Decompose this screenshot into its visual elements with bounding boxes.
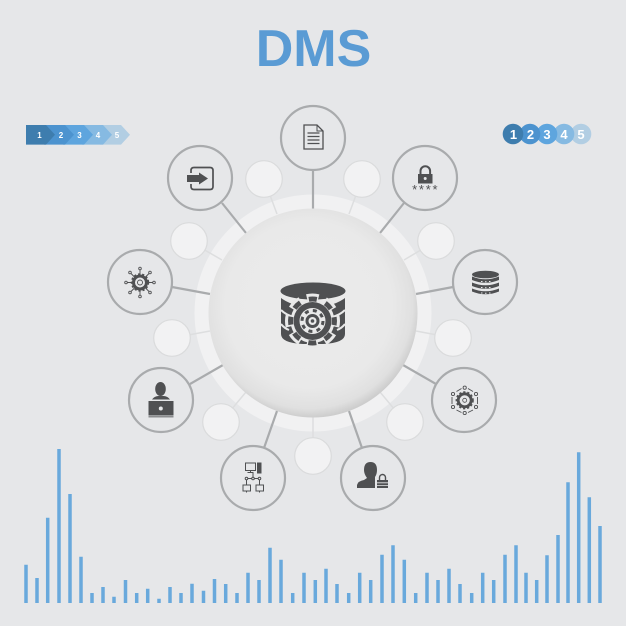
- step circles legend: 5: [577, 127, 585, 142]
- icon: document: [304, 125, 323, 149]
- step circles legend: [503, 124, 591, 144]
- step circles legend: 2: [527, 127, 534, 142]
- large node circles: [108, 106, 517, 510]
- icon: login arrow: [187, 168, 213, 190]
- title: DMS: [256, 20, 371, 78]
- step arrows legend: 5: [115, 131, 120, 140]
- step arrows legend: [26, 125, 130, 145]
- icon: gear with orbit: [451, 386, 478, 415]
- icon: lock with password: [412, 166, 439, 197]
- icon: lock with password: ****: [412, 182, 439, 197]
- central circle: [208, 208, 418, 418]
- icon: person at laptop: [148, 382, 174, 418]
- step arrows legend: 1: [37, 131, 42, 140]
- icon: database with gear: [280, 282, 346, 351]
- bar chart: [26, 449, 600, 603]
- step arrows legend: 3: [77, 131, 82, 140]
- step arrows legend: 2: [59, 131, 64, 140]
- icon: hub gear: [125, 267, 155, 298]
- small node circles: [154, 161, 471, 474]
- icon: computer network: [243, 463, 264, 492]
- step circles legend: 1: [510, 127, 517, 142]
- step circles legend: 4: [560, 127, 568, 142]
- connector lines: large nodes: [172, 170, 453, 448]
- icon: database: [472, 271, 499, 294]
- outer ring: [194, 194, 432, 432]
- icon: user with lock: [357, 462, 388, 488]
- step circles legend: 3: [543, 127, 551, 142]
- step arrows legend: 4: [96, 131, 101, 140]
- connector lines: small nodes: [172, 179, 453, 456]
